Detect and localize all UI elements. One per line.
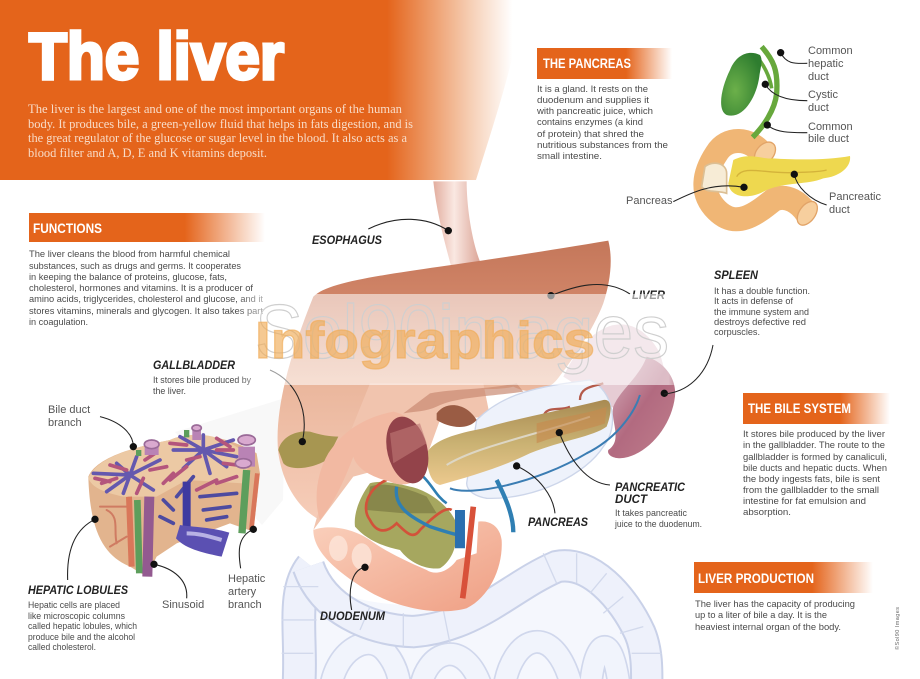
body text: duodenum and supplies it (537, 94, 649, 105)
pancreas (728, 156, 850, 196)
illustration: intestines (282, 553, 662, 679)
callout: pancreatic duct: juice to the duodenum. (614, 518, 702, 529)
cut duct (176, 525, 229, 557)
body text: with pancreatic juice, which (536, 105, 653, 116)
inset pointers (673, 49, 827, 205)
lobule labels: Bile duct (48, 404, 90, 416)
dark fold (403, 383, 523, 413)
body text: The liver has the capacity of producing (695, 598, 855, 609)
body text: in coagulation. (29, 316, 88, 327)
label: liver: LIVER (632, 290, 666, 302)
lobule labels: Hepatic (228, 573, 266, 585)
body text: the body ingests fats, bile is sent (743, 473, 880, 484)
callout: spleen: It acts in defense of (714, 295, 793, 306)
credit: ©Sol90 Images (894, 607, 901, 650)
inset labels: Common (808, 45, 853, 57)
body text: absorption. (743, 506, 791, 517)
body text: small intestine. (537, 150, 602, 161)
decorative wedge (175, 398, 285, 525)
haustra highlights (329, 536, 372, 570)
lobule labels: branch (48, 417, 82, 429)
callout: pancreatic duct: It takes pancreatic (615, 507, 687, 518)
gallbladder (278, 431, 338, 468)
inset labels: Pancreatic (829, 191, 881, 203)
body text: cholesterol, hormones and vitamins. It is a producer of (29, 282, 253, 293)
heading bar (743, 393, 890, 424)
label: pancreas: PANCREAS (528, 517, 588, 529)
branching pattern (93, 435, 237, 547)
lobule top (88, 435, 250, 497)
lobule labels: artery (228, 586, 257, 598)
body text: in the gallbladder. The route to the (743, 439, 885, 450)
ducts (753, 47, 777, 137)
inset labels: Pancreas (626, 195, 673, 207)
callout: spleen: It has a double function. (714, 285, 810, 296)
liver (278, 241, 611, 520)
body text: nutritious substances from the (537, 139, 668, 150)
heading bar (694, 562, 873, 593)
callout: gallbladder (153, 360, 251, 396)
vessels (366, 477, 473, 598)
tubes (129, 430, 257, 577)
callout: hepatic lobules: called cholesterol. (28, 641, 96, 652)
lobule labels: branch (228, 599, 262, 611)
body text: of protein) that shred the (537, 128, 644, 139)
body text: amino acids, triglycerides, cholesterol and glucose, and it (29, 293, 263, 304)
illustration: liver lobule (88, 425, 260, 577)
callout: hepatic lobules: like microscopic columns (28, 610, 125, 621)
lobule body (88, 435, 260, 577)
callout: spleen: corpuscles. (714, 326, 760, 337)
inset labels: duct (808, 102, 829, 114)
spleen (608, 357, 675, 458)
heading: THE PANCREAS (543, 56, 631, 71)
stomach (467, 380, 613, 498)
label: duodenum: DUODENUM (320, 611, 385, 623)
dark shading (367, 485, 437, 513)
inset labels: duct (829, 204, 850, 216)
lobule pointers (68, 417, 257, 598)
tube highlight (187, 533, 222, 540)
body text (536, 83, 668, 161)
body text: bile ducts and hepatic ducts. When (743, 462, 887, 473)
callout: hepatic lobules: produce bile and the alcohol (28, 631, 135, 642)
duodenum window (702, 163, 727, 193)
section: functions (29, 213, 265, 327)
inset labels: Common (808, 121, 853, 133)
callout: spleen: SPLEEN (714, 270, 759, 282)
callout: hepatic lobules: HEPATIC LOBULES (28, 585, 128, 597)
body text (29, 248, 263, 327)
callout: spleen (714, 270, 810, 337)
pancreatic duct (737, 170, 827, 177)
callout: hepatic lobules: Hepatic cells are placed (28, 599, 120, 610)
pancreatic head (355, 482, 457, 569)
heading bar (537, 48, 672, 79)
header background (0, 0, 523, 180)
duodenum (705, 141, 807, 219)
cut tube (317, 412, 428, 520)
inset labels: bile duct (808, 133, 849, 145)
lobule labels (48, 404, 266, 611)
vessels near pancreas (543, 383, 603, 417)
callout: gallbladder: GALLBLADDER (153, 360, 236, 372)
duodenum opening (750, 138, 780, 169)
title: The liver (29, 19, 284, 93)
section: the pancreas (536, 48, 672, 161)
callout: hepatic lobules: called hepatic lobules, which (28, 620, 137, 631)
pancreatic duct line (447, 417, 590, 465)
stomach back (563, 324, 670, 410)
watermark: Infographics (255, 312, 595, 370)
body text (695, 598, 855, 632)
duodenum end (793, 198, 822, 229)
body text: contains enzymes (a kind (537, 116, 643, 127)
body text: substances, such as drugs and germs. It cooperates (29, 260, 241, 271)
spleen pointer (664, 345, 713, 394)
intro text: the great regulator of the glucose or sugar level in the blood. It also acts as a (28, 131, 408, 145)
section: the bile system (743, 393, 890, 517)
intro text: blood filter and A, D, E and K vitamins deposit. (28, 146, 267, 160)
lobule labels: Sinusoid (162, 599, 204, 611)
gallbladder (721, 53, 762, 116)
watermark: Sol90images (255, 290, 669, 375)
orange rim (537, 407, 607, 443)
body text: intestine for fat emulsion and (743, 495, 866, 506)
intro text: body. It produces bile, a green-yellow fluid that helps in fats digestion, and is (28, 117, 413, 131)
body text: in keeping the balance of proteins, glucose, fats, (29, 271, 227, 282)
callout: pancreatic duct: DUCT (615, 494, 648, 506)
body text: from the gallbladder to the small (743, 484, 879, 495)
intro text (28, 102, 413, 160)
inset labels: duct (808, 71, 829, 83)
body text: stores vitamins, minerals and glycogen. It also takes part (29, 305, 263, 316)
esophagus (433, 181, 480, 268)
inset labels: Cystic (808, 89, 838, 101)
vein branch (497, 480, 513, 532)
heading: LIVER PRODUCTION (698, 571, 814, 586)
heading: FUNCTIONS (33, 221, 102, 236)
organ pointers (270, 219, 668, 610)
body text: It is a gland. It rests on the (537, 83, 648, 94)
section: liver production (694, 562, 873, 632)
callout: hepatic lobules (28, 585, 137, 652)
splenic vein (450, 395, 640, 491)
intro text: The liver is the largest and one of the most important organs of the human (28, 102, 402, 116)
callout: gallbladder: It stores bile produced by (153, 374, 251, 385)
heading: THE BILE SYSTEM (748, 401, 851, 416)
illustration: digestive organs (278, 181, 675, 611)
lumen highlight (390, 423, 427, 463)
tube lumen (380, 412, 435, 488)
inset labels (626, 45, 881, 216)
body text: It stores bile produced by the liver (743, 428, 885, 439)
cystic duct (755, 55, 772, 88)
label: esophagus: ESOPHAGUS (312, 235, 382, 247)
body text (743, 428, 887, 517)
callout: pancreatic duct (614, 482, 702, 529)
body text: The liver cleans the blood from harmful chemical (29, 248, 230, 259)
callout: spleen: destroys defective red (714, 316, 806, 327)
body text: gallbladder is formed by canaliculi, (743, 451, 887, 462)
heading bar (29, 213, 265, 242)
callout: pancreatic duct: PANCREATIC (615, 482, 686, 494)
connective tissue (437, 405, 477, 427)
body text: heaviest internal organ of the body. (695, 621, 841, 632)
body text: up to a liter of bile a day. It is the (695, 609, 827, 620)
callout: spleen: the immune system and (714, 306, 809, 317)
liver underside (313, 383, 490, 530)
watermark band (236, 294, 682, 385)
panel: header (0, 0, 523, 180)
duodenum (313, 521, 502, 611)
inset labels: hepatic (808, 58, 844, 70)
pancreas (427, 400, 611, 485)
callout: gallbladder: the liver. (153, 385, 186, 396)
tube openings (144, 425, 255, 468)
illustration: gallbladder and pancreas inset (673, 47, 850, 229)
